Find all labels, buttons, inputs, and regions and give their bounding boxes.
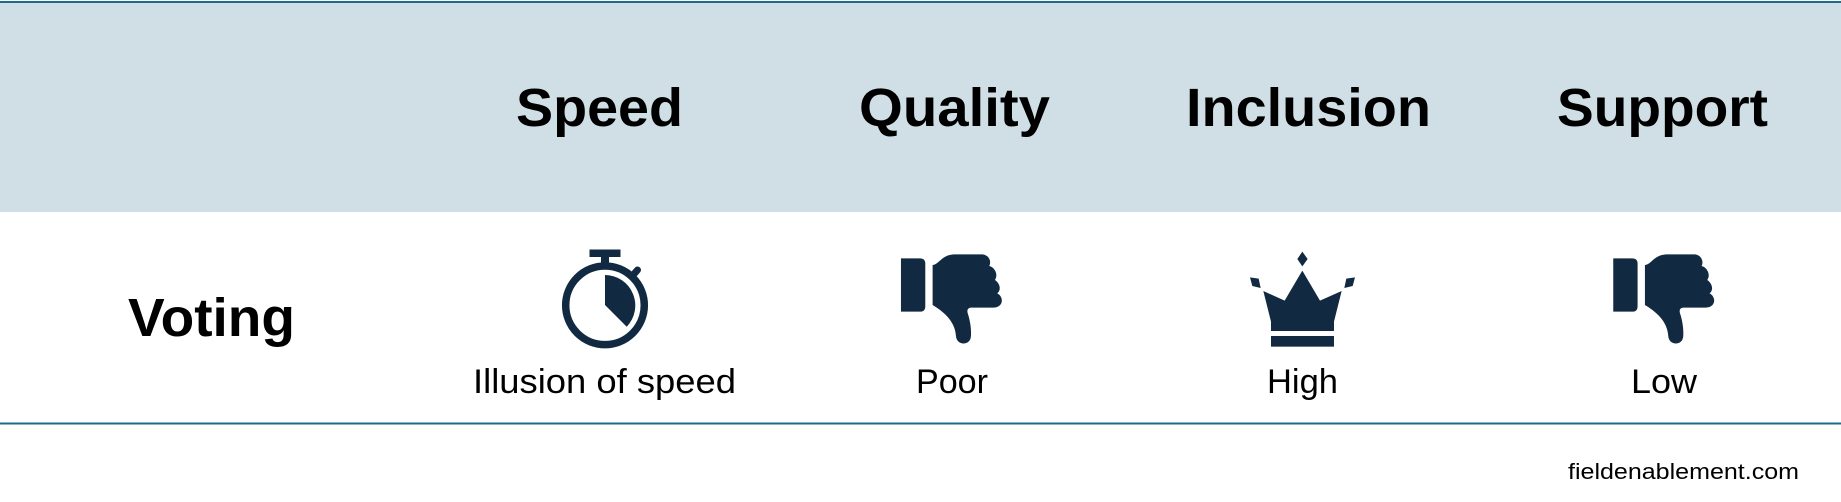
heading: Quality: Quality bbox=[859, 78, 1050, 138]
icon: thumbs down (quality) bbox=[901, 254, 1002, 343]
icon: thumbs down (support) bbox=[1613, 254, 1714, 343]
heading: Speed: Speed bbox=[516, 78, 683, 138]
label: Illusion of speed: Illusion of speed bbox=[473, 363, 736, 401]
heading: Inclusion: Inclusion bbox=[1186, 78, 1431, 138]
label: Low: Low bbox=[1631, 363, 1697, 401]
label: Poor: Poor bbox=[916, 363, 988, 401]
row heading: Voting: Voting bbox=[128, 288, 295, 348]
panel: header band bbox=[0, 1, 1841, 212]
icon: stopwatch bbox=[566, 250, 644, 345]
icon: crown bbox=[1250, 252, 1355, 347]
heading: Support: Support bbox=[1557, 78, 1768, 138]
label: High: High bbox=[1267, 363, 1338, 401]
footer credit: fieldenablement.com bbox=[1568, 459, 1799, 484]
